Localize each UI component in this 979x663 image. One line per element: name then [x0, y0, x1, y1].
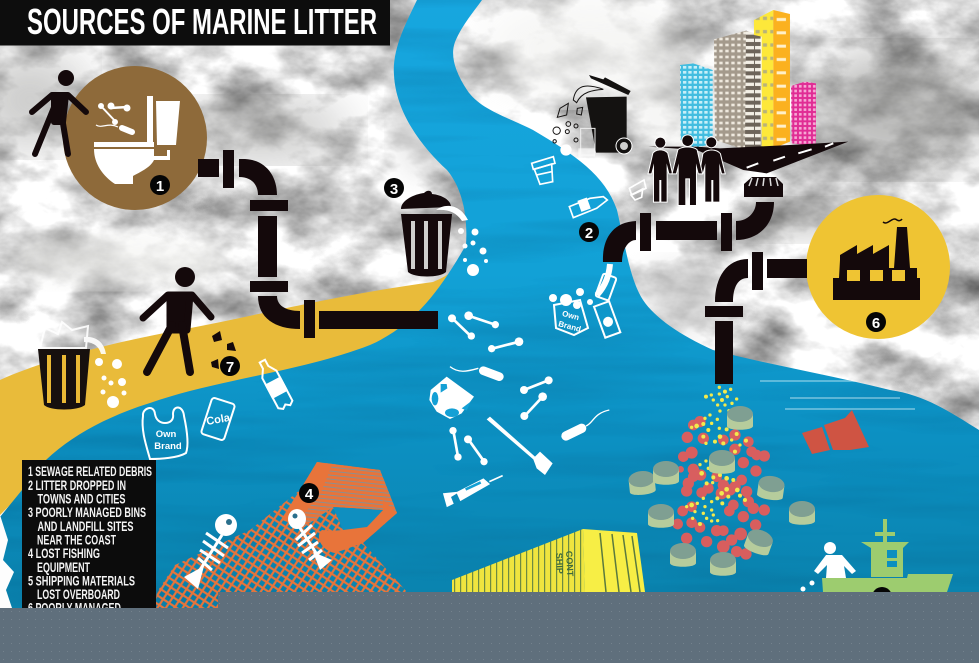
icon: litter spilling from bin 3 — [458, 228, 488, 276]
badge 4: 4 — [305, 486, 314, 503]
legend panel: 1 SEWAGE RELATED DEBRIS — [28, 463, 152, 479]
panel: factory circle — [806, 195, 950, 339]
icon: litter from city pipe — [549, 264, 620, 338]
badge 6 — [866, 312, 886, 332]
badge 3: 3 — [390, 181, 398, 198]
badge 5 — [872, 587, 892, 607]
icon: cola can: Cola — [205, 412, 232, 428]
icon: red brick debris — [802, 410, 869, 454]
icon: large pellet cylinders — [628, 406, 815, 576]
icon: cup and bottle litter — [532, 157, 646, 218]
icon: fish skeleton right — [288, 509, 332, 570]
icon: shipping container — [452, 529, 645, 592]
legend panel: NEAR THE COAST — [37, 532, 116, 548]
icon: bin on the beach — [38, 322, 126, 410]
legend panel: TOWNS AND CITIES — [38, 490, 126, 506]
badge 1 — [150, 175, 170, 195]
legend panel — [22, 460, 156, 616]
badge 3 — [384, 178, 404, 198]
icon: toilet — [94, 96, 180, 184]
icon: small litter pieces by person — [211, 331, 236, 369]
badge 4 — [299, 483, 319, 503]
icon: road — [648, 142, 848, 173]
panel: city litter scene — [532, 10, 848, 218]
badge 2: 2 — [585, 225, 593, 242]
icon: ship with person — [800, 519, 953, 592]
icon: fish skeleton left — [184, 514, 237, 589]
icon: cotton bud and tampon — [96, 103, 132, 132]
white shore bottom left — [0, 490, 30, 608]
icon: three people — [649, 135, 725, 205]
icon: person on ship — [800, 542, 856, 592]
pipe: city to river — [603, 177, 783, 262]
icon: own brand bag: Own — [156, 429, 176, 440]
icon: shipping container: CONT — [564, 551, 575, 577]
icon: bottle on shore — [255, 357, 294, 411]
footer overlay band — [0, 592, 979, 663]
icon: litter from city pipe: Own — [561, 309, 580, 322]
badge 1: 1 — [156, 178, 164, 195]
icon: street drain grate — [749, 178, 778, 186]
legend panel: EQUIPMENT — [37, 559, 90, 575]
icon: person by toilet — [32, 70, 86, 154]
title — [0, 0, 390, 46]
icon: own brand bag: Brand — [154, 441, 182, 452]
panel: sewage circle with toilet — [63, 66, 207, 210]
icon: fishing net — [155, 462, 407, 608]
legend panel: 6 POORLY MANAGED — [28, 600, 121, 616]
title: SOURCES OF MARINE LITTER — [27, 1, 377, 42]
icon: wheelie bin — [553, 75, 632, 157]
badge 7 — [220, 356, 240, 376]
icon: shipping container: SHIP — [554, 553, 565, 574]
badge 2 — [579, 222, 599, 242]
icon: own brand bag — [143, 407, 187, 459]
sand beach — [0, 255, 480, 530]
legend panel: 4 LOST FISHING — [28, 545, 100, 561]
icon: person dropping litter — [143, 267, 211, 372]
pipe: sewage to river — [198, 150, 438, 338]
legend panel: AND LANDFILL SITES — [38, 518, 134, 534]
icon: overflowing bin 3 — [401, 191, 468, 276]
icon: cotton buds, tampons, nappy, toothbrush and syringe — [429, 311, 609, 506]
chart: plastic pellets spill — [672, 386, 770, 560]
legend panel: LOST OVERBOARD — [37, 586, 120, 602]
badge 6: 6 — [872, 315, 880, 332]
pipe: factory to sea — [705, 252, 807, 384]
icon: litter from city pipe: Brand — [557, 319, 582, 334]
badge 7: 7 — [226, 359, 234, 376]
legend panel: 3 POORLY MANAGED BINS — [28, 504, 146, 520]
icon: skyline — [680, 10, 816, 150]
legend panel: 5 SHIPPING MATERIALS — [28, 572, 135, 588]
icon: factory — [833, 219, 920, 300]
icon: cola can — [200, 397, 238, 442]
legend panel: 2 LITTER DROPPED IN — [28, 477, 126, 493]
